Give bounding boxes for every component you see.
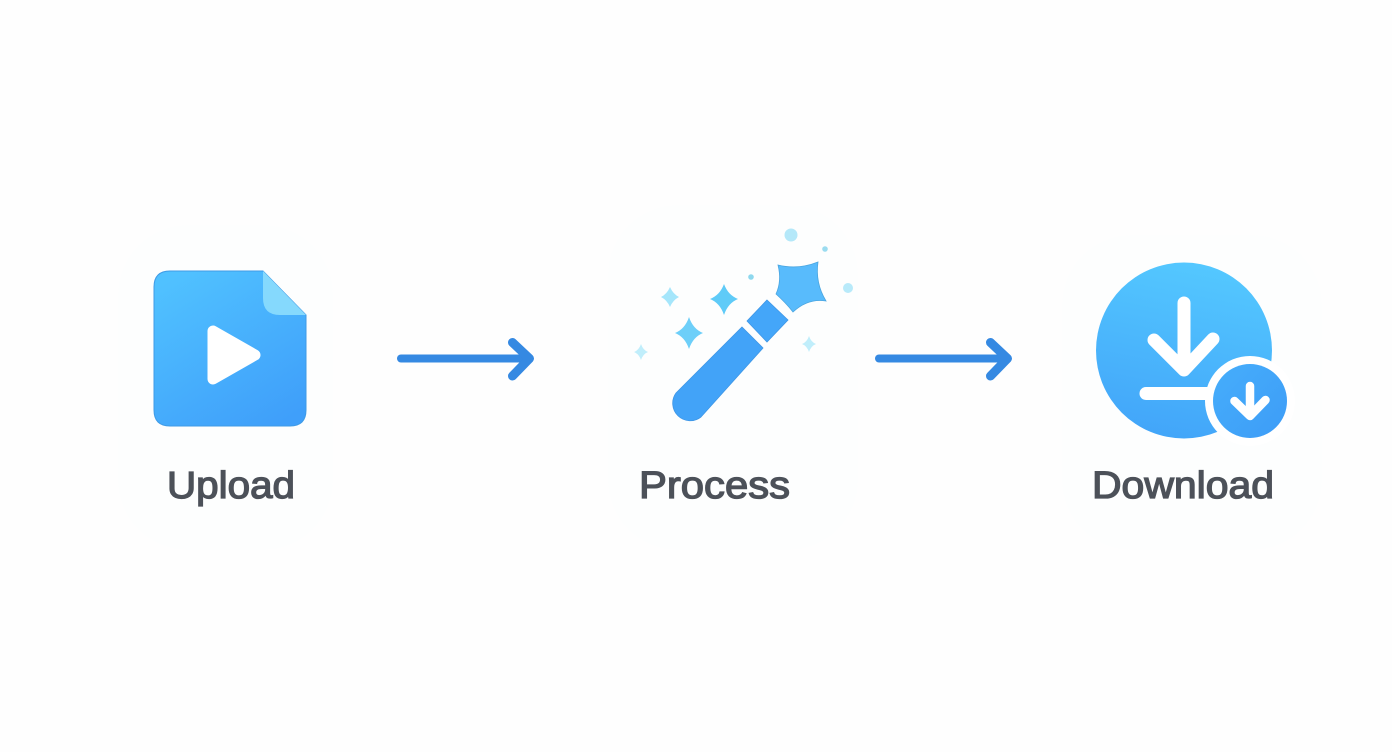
badge: [1205, 356, 1295, 446]
arrow: upload to process: [401, 342, 530, 376]
wand star: [776, 262, 826, 312]
label: download: Download: [1092, 465, 1274, 507]
step: upload: [154, 271, 306, 507]
step: download: [1092, 262, 1295, 507]
wand handle: [673, 327, 763, 421]
step: process: [634, 228, 853, 507]
icon: video file: [154, 271, 306, 426]
label: process: Process: [639, 465, 790, 507]
small arrow: [1234, 386, 1266, 416]
icon: folded corner: [263, 271, 306, 315]
icon: magic wand: [634, 228, 853, 421]
dots: [748, 228, 853, 293]
sparkles: [634, 284, 816, 360]
label: upload: Upload: [167, 465, 295, 507]
icon: download circle: [1096, 262, 1295, 446]
icon: play triangle: [213, 331, 255, 379]
large arrow: [1146, 303, 1225, 394]
wand band: [747, 300, 788, 342]
arrow: process to download: [879, 342, 1008, 376]
